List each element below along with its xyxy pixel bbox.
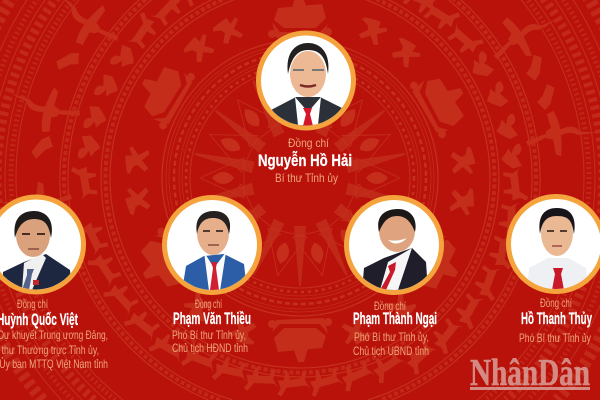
ring of large long-beaked birds — [0, 0, 600, 254]
portrait card: Phạm Thành Ngại — [346, 198, 442, 358]
name: Huỳnh Quốc Việt — [0, 310, 78, 329]
label: Đồng chí — [374, 299, 406, 313]
photo of Huỳnh Quốc Việt — [2, 211, 72, 292]
role — [172, 328, 248, 355]
role: Dự khuyết Trung ương Đảng, — [0, 328, 108, 342]
role: Chủ tịch HĐND tỉnh — [172, 341, 248, 355]
name: Nguyễn Hồ Hải — [258, 151, 352, 170]
label: Đồng chí — [17, 297, 48, 311]
role: Bí thư Tỉnh ủy — [275, 171, 338, 185]
name: Phạm Thành Ngại — [353, 309, 437, 328]
star rays of the drum centre — [193, 70, 407, 286]
photo of Nguyễn Hồ Hải — [270, 43, 344, 130]
portrait ring — [346, 198, 442, 292]
portrait card: Phạm Văn Thiều — [164, 198, 260, 355]
role — [353, 330, 429, 358]
portrait ring — [508, 196, 600, 292]
portrait card: Huỳnh Quốc Việt — [0, 197, 108, 371]
label: Đồng chí — [540, 296, 572, 310]
portrait card: Nguyễn Hồ Hải — [258, 33, 354, 185]
role: Phó Bí thư Tỉnh ủy, — [354, 330, 429, 344]
label: Đồng chí — [195, 297, 222, 311]
portrait card: Hồ Thanh Thủy — [508, 196, 600, 345]
name: Phạm Văn Thiều — [173, 309, 251, 328]
role — [0, 328, 108, 371]
role: Chủ tịch UBND tỉnh — [353, 344, 429, 358]
portrait ring — [0, 197, 84, 292]
ring of boats and figures — [124, 0, 477, 362]
role: Phó Bí thư Tỉnh ủy, — [172, 328, 246, 342]
photo of Phạm Thành Ngại — [362, 209, 428, 291]
label: Đồng chí — [288, 136, 330, 150]
ring of small animals — [71, 0, 529, 397]
photo of Hồ Thanh Thủy — [527, 208, 588, 290]
portrait ring — [258, 33, 354, 128]
photo of Phạm Văn Thiều — [182, 211, 247, 291]
portrait ring — [164, 198, 260, 292]
